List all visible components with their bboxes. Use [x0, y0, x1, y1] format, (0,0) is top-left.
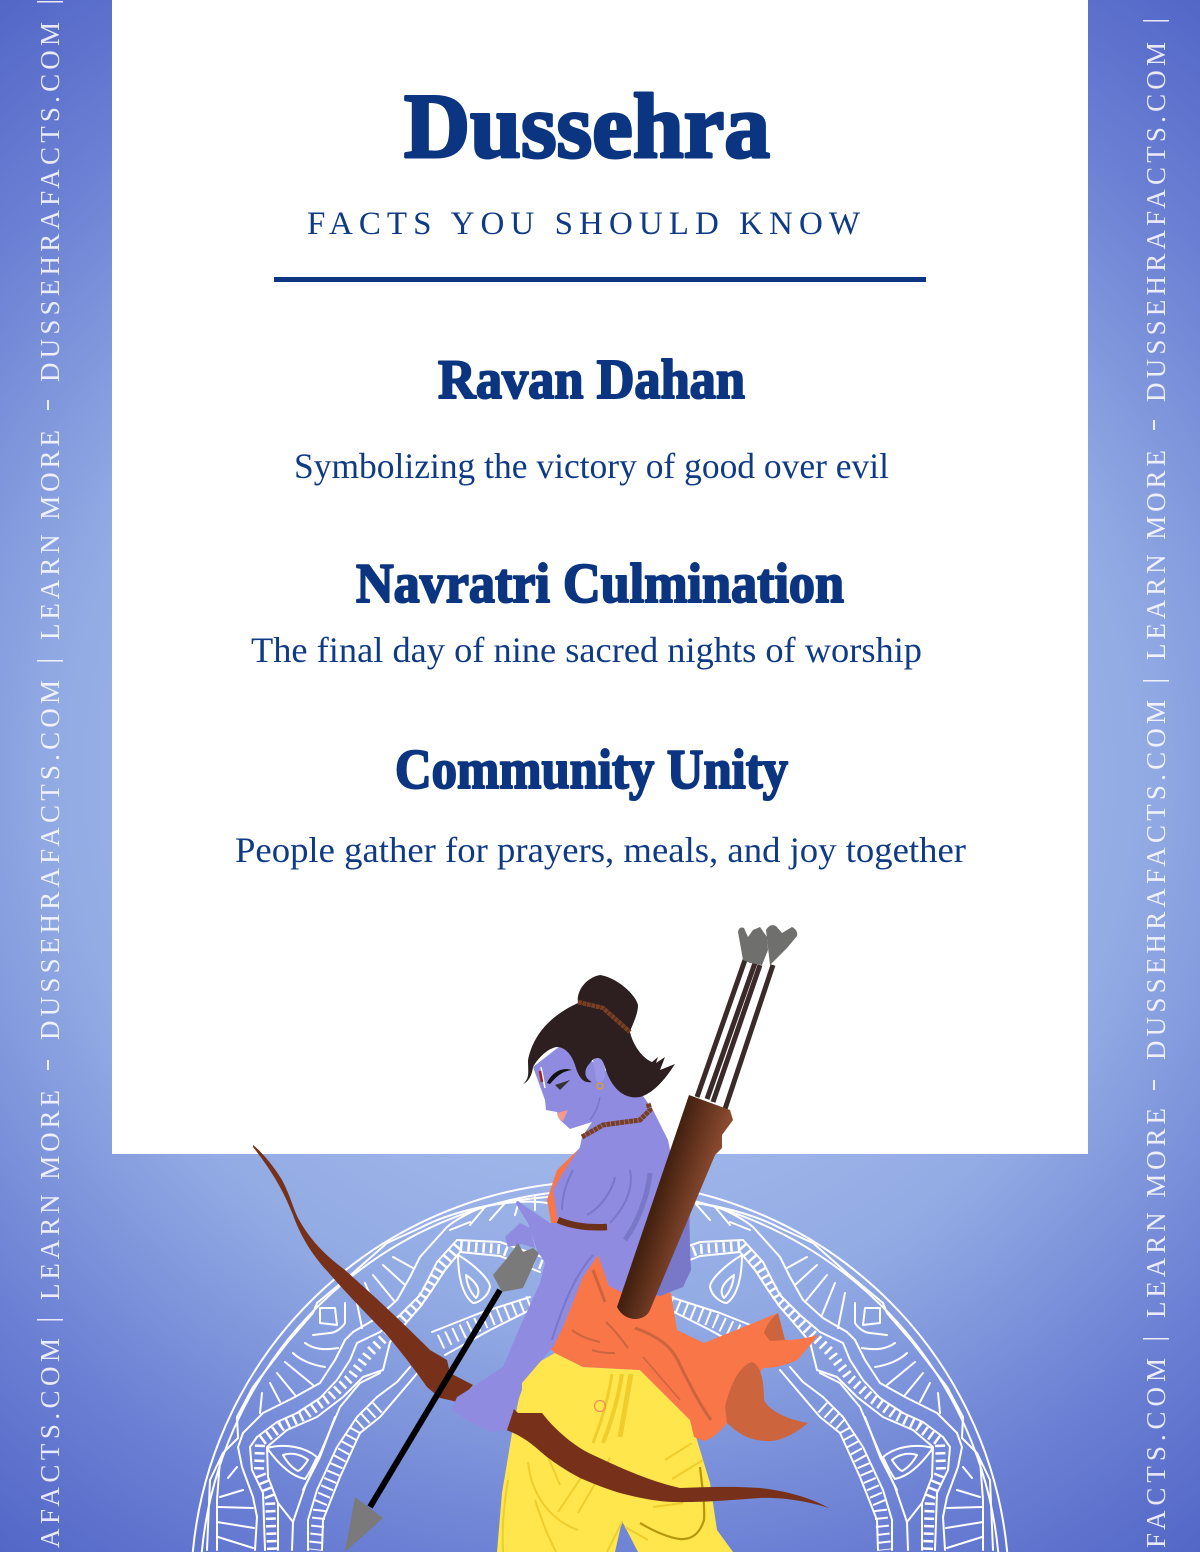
side strip: left: [35, 1, 65, 1548]
necklace: [582, 1103, 650, 1137]
long arrow: [345, 1243, 539, 1552]
fact 2: Navratri Culmination: [251, 553, 922, 670]
side strip: right: LEARN MORE: [1141, 450, 1171, 660]
eye: [555, 1080, 570, 1090]
hair band: [578, 1002, 630, 1032]
dhoti: [497, 1353, 733, 1552]
dhoti folds: [503, 1374, 703, 1552]
orange chest cloth: [547, 1143, 585, 1227]
arm creases: [552, 1170, 650, 1340]
fact 1: Ravan Dahan: Symbolizing the victory of good over evil: [294, 446, 889, 486]
fact 3: Community Unity: Community Unity: [395, 739, 788, 801]
side strip: left: DUSSEHRAFACTS.COM: [35, 22, 65, 382]
tilak: [540, 1067, 545, 1088]
heading divider: [274, 277, 926, 282]
fact 2: Navratri Culmination: Navratri Culmination: [356, 553, 844, 615]
front hand: [452, 1367, 522, 1432]
side strip: right: FACTS.COM: [1141, 1358, 1171, 1548]
navel mark: [594, 1400, 606, 1412]
fact 1: Ravan Dahan: Ravan Dahan: [438, 349, 745, 411]
fist: [505, 1223, 535, 1248]
sash folds: [572, 1270, 711, 1420]
side strip: right: LEARN MORE: [1141, 1108, 1171, 1318]
subtitle: FACTS YOU SHOULD KNOW: [307, 206, 861, 242]
torso, arm and head: [452, 1046, 690, 1432]
title: Dussehra: [404, 75, 770, 177]
earring: [597, 1083, 603, 1089]
side strip: right: DUSSEHRAFACTS.COM: [1141, 42, 1171, 402]
armband: [558, 1220, 607, 1227]
lips: [557, 1110, 568, 1121]
fact 2: Navratri Culmination: The final day of nine sacred nights of worship: [251, 630, 922, 670]
fact 1: Ravan Dahan: [294, 349, 889, 486]
sleeve shadow: [640, 1205, 691, 1296]
bow lower limb: [501, 1407, 829, 1508]
side strip: right: [1141, 20, 1171, 1548]
sash shadow flap: [725, 1362, 808, 1441]
mandala semicircle: [193, 1181, 1007, 1552]
side strip: left: LEARN MORE: [35, 1090, 65, 1300]
side strip: left: LEARN MORE: [35, 430, 65, 640]
quiver: [617, 1095, 733, 1319]
illustration: archer: [253, 925, 829, 1552]
fact 3: Community Unity: People gather for prayers, meals, and joy together: [235, 830, 966, 870]
bow upper limb: [253, 1145, 473, 1402]
ear: [593, 1058, 605, 1082]
neck line: [590, 1097, 600, 1120]
side strip: right: DUSSEHRAFACTS.COM: [1141, 700, 1171, 1060]
side strip: left: AFACTS.COM: [35, 1338, 65, 1548]
arrows in quiver: [697, 925, 797, 1109]
orange sash: [540, 1255, 818, 1441]
dhoti dark fold: [640, 1467, 704, 1539]
fact 3: Community Unity: [235, 739, 966, 870]
panel: white content card: [112, 0, 1088, 1154]
hair: [523, 975, 675, 1097]
eyebrow: [547, 1069, 572, 1084]
side strip: left: DUSSEHRAFACTS.COM: [35, 680, 65, 1040]
